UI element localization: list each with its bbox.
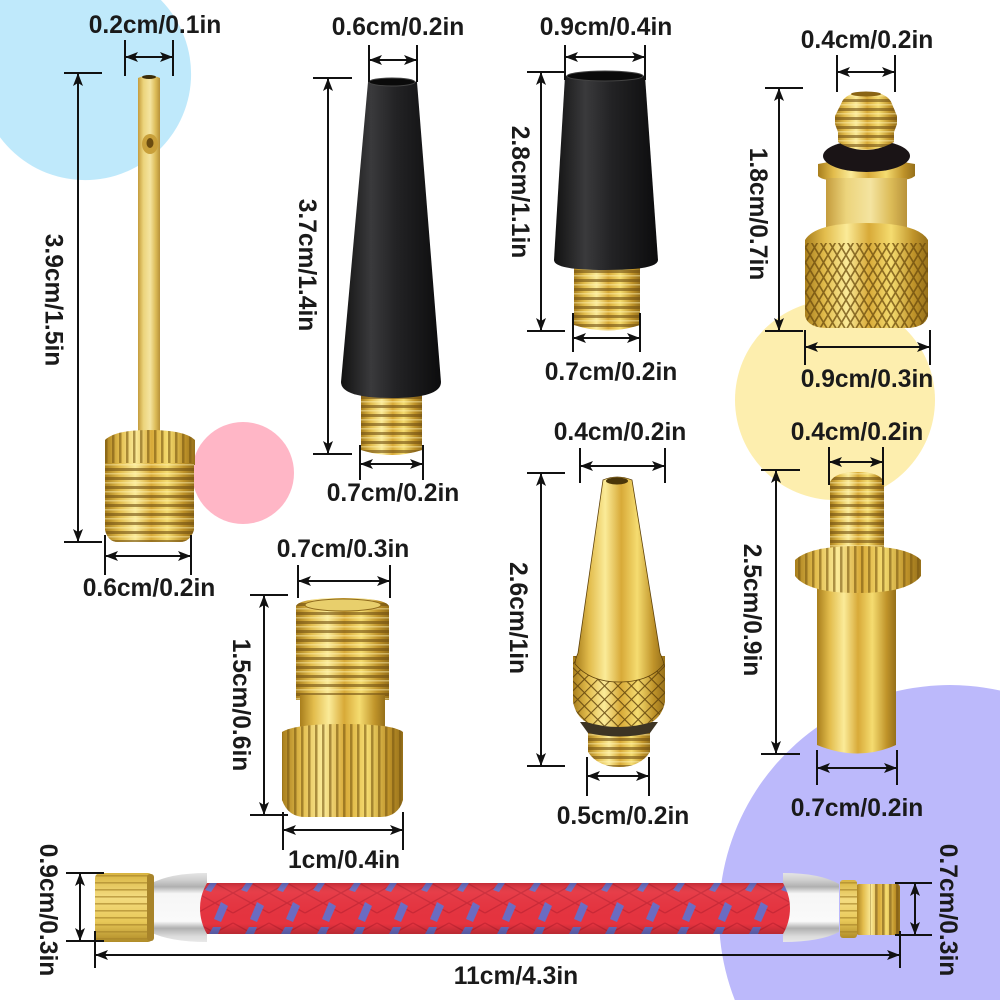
- dimension: short cone height: 2.8cm/1.1in: [506, 126, 533, 258]
- dimension: flanged adapter height: [738, 470, 800, 754]
- part: inflation needle: [105, 75, 195, 542]
- dimension: hose left height: [34, 844, 104, 976]
- dimension: needle height: [40, 73, 102, 542]
- dimension: flanged adapter height: 2.5cm/0.9in: [738, 544, 765, 676]
- part: short black cone adapter: [554, 71, 658, 330]
- dimension: long cone thread width: [327, 445, 459, 507]
- dimension: hose total length: [95, 931, 900, 990]
- dimension: O-ring adapter base width: 0.9cm/0.3in: [801, 366, 933, 393]
- dimension: needle height: 3.9cm/1.5in: [40, 234, 66, 366]
- dimension: gold cone thread width: 0.5cm/0.2in: [557, 803, 689, 830]
- background: purple circle: [719, 685, 1000, 1000]
- background: pink circle: [192, 422, 294, 524]
- dimension: O-ring adapter height: [744, 88, 803, 331]
- dimension: flanged adapter base width: [791, 750, 923, 822]
- dimension: long cone thread width: 0.7cm/0.2in: [327, 480, 459, 507]
- dimension: gold cone thread width: [557, 757, 689, 830]
- dimension: short cone top width: [540, 14, 672, 80]
- dimension: long cone height: 3.7cm/1.4in: [293, 199, 320, 331]
- dimension: valve adapter height: [227, 595, 288, 815]
- dimension: gold cone top width: 0.4cm/0.2in: [554, 419, 686, 446]
- background: yellow circle: [735, 300, 935, 500]
- dimension: O-ring adapter height: 1.8cm/0.7in: [744, 148, 771, 280]
- dimension: valve adapter top width: 0.7cm/0.3in: [277, 536, 409, 563]
- dimension: valve adapter base width: 1cm/0.4in: [288, 847, 400, 874]
- dimension: O-ring adapter top width: 0.4cm/0.2in: [801, 27, 933, 54]
- dimension: hose total length: 11cm/4.3in: [454, 963, 578, 990]
- part: gold cone adapter: [573, 477, 665, 767]
- part: O-ring thread adapter: [805, 92, 928, 328]
- dimension: flanged adapter base width: 0.7cm/0.2in: [791, 795, 923, 822]
- dimension: O-ring adapter top width: [801, 27, 933, 92]
- dimension: hose left height: 0.9cm/0.3in: [34, 844, 61, 976]
- dimension: gold cone height: [504, 473, 565, 766]
- dimension: flanged adapter top width: 0.4cm/0.2in: [791, 419, 923, 446]
- dimension: hose right height: 0.7cm/0.3in: [934, 844, 961, 976]
- dimension: long cone top width: [332, 14, 464, 82]
- dimension: O-ring adapter base width: [801, 330, 933, 393]
- dimension: gold cone height: 2.6cm/1in: [504, 562, 531, 674]
- dimension: needle top width: 0.2cm/0.1in: [89, 12, 221, 39]
- dimension: short cone thread width: 0.7cm/0.2in: [545, 359, 677, 386]
- background: light blue circle: [0, 0, 191, 180]
- dimension: long cone height: [293, 78, 352, 454]
- dimension: needle base width: 0.6cm/0.2in: [83, 575, 215, 602]
- dimension: valve adapter top width: [277, 536, 409, 598]
- part: long black cone adapter: [341, 78, 441, 455]
- dimension: short cone top width: 0.9cm/0.4in: [540, 14, 672, 41]
- part: flanged adapter: [795, 472, 921, 754]
- dimension: gold cone top width: [554, 419, 686, 483]
- part: braided hose: [95, 873, 900, 942]
- dimension: short cone thread width: [545, 313, 677, 386]
- dimension: long cone top width: 0.6cm/0.2in: [332, 14, 464, 41]
- dimension: valve adapter height: 1.5cm/0.6in: [227, 639, 254, 771]
- dimension: short cone height: [506, 72, 565, 331]
- dimension: hose right height: [895, 844, 961, 976]
- dimension: needle top width: [89, 12, 221, 76]
- dimension: needle base width: [83, 535, 215, 602]
- dimension: flanged adapter top width: [791, 419, 923, 485]
- dimension: valve adapter base width: [283, 812, 403, 874]
- part: threaded valve adapter: [282, 598, 403, 817]
